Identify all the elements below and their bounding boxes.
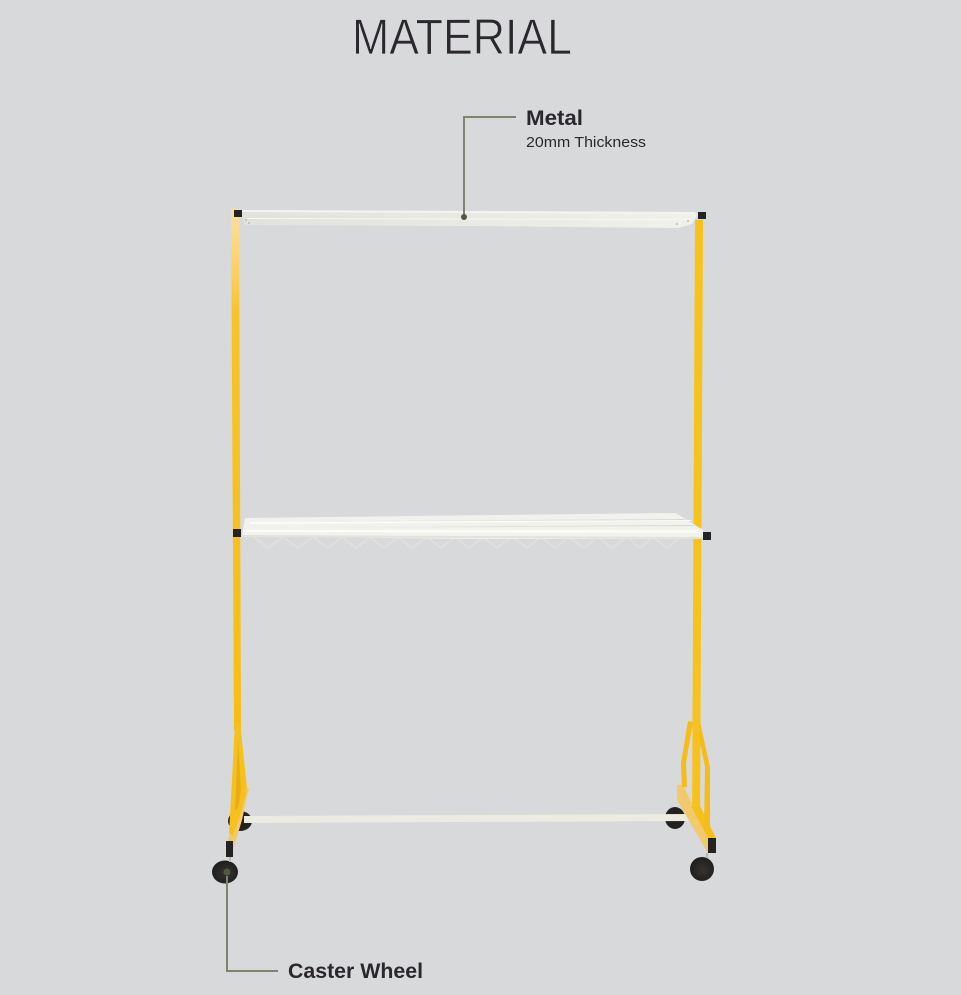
- right foot: [677, 721, 716, 853]
- right post: [692, 220, 703, 820]
- label: caster wheel: Caster Wheel: [288, 960, 423, 983]
- bottom cross bar: [244, 814, 690, 823]
- front caster wheels: [212, 853, 714, 884]
- rear caster wheels: [228, 807, 685, 831]
- left foot: [226, 722, 249, 857]
- label: metal: [526, 107, 646, 151]
- middle shelf: [233, 513, 711, 548]
- leader: metal: [461, 117, 516, 220]
- top shelf: [234, 210, 706, 228]
- label: metal: Metal: [526, 107, 583, 130]
- shelf bars: [242, 513, 703, 539]
- title: MATERIAL: [352, 9, 572, 65]
- wire zigzag: [253, 536, 681, 548]
- rack frame: [212, 209, 716, 884]
- left post: [231, 209, 241, 730]
- leader: caster wheel: [224, 868, 278, 971]
- label: metal: 20mm Thickness: [526, 134, 646, 151]
